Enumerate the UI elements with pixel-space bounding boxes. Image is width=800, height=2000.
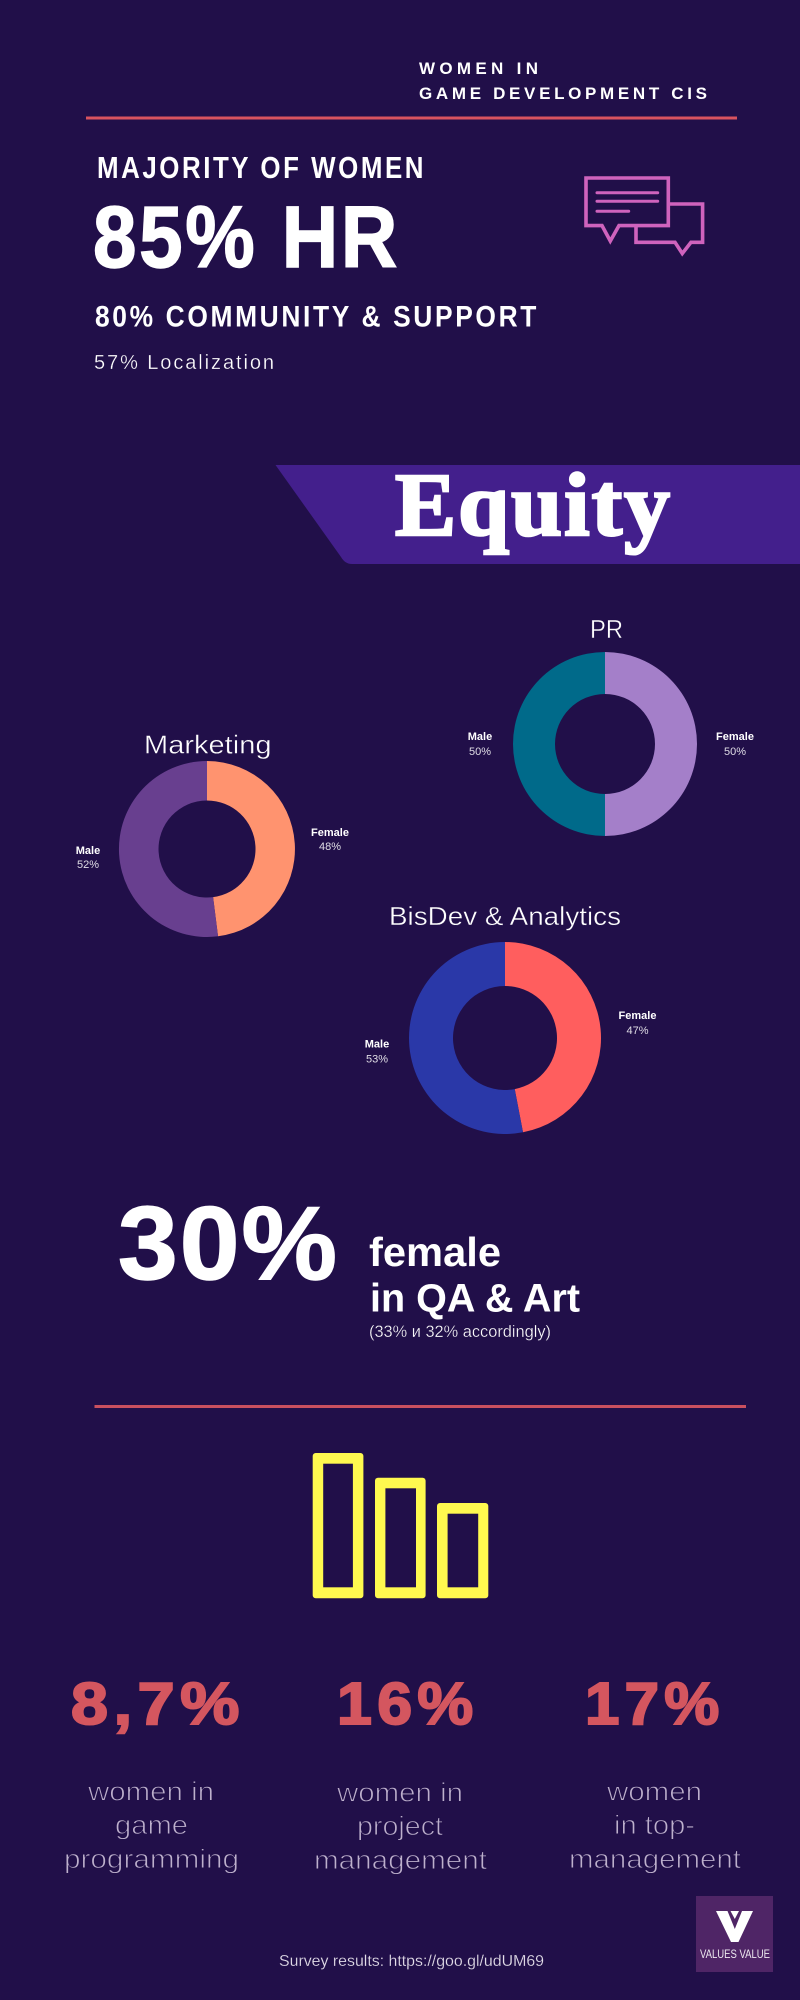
icon: yellow bar chart	[313, 1453, 488, 1598]
chart: BisDev and Analytics donut: BisDev & Analytics	[389, 901, 621, 931]
banner: equity	[276, 456, 800, 564]
chart: BisDev and Analytics donut: Female	[619, 1010, 656, 1022]
title	[419, 59, 707, 103]
chart: Marketing donut	[76, 730, 349, 937]
panel: stat women in top-management: in top-	[614, 1810, 695, 1840]
survey source: Survey results: https://goo.gl/udUM69	[279, 1953, 544, 1970]
panel: stat women in top-management: women	[606, 1777, 702, 1807]
stat: 30% female in QA and Art: in QA & Art	[370, 1276, 580, 1320]
logo: Values Value: VALUES VALUE	[700, 1947, 770, 1961]
chart: PR donut: 50%	[469, 746, 491, 758]
panel: stat women in game programming: game	[115, 1810, 188, 1840]
panel: stat women in game programming: women in	[87, 1777, 214, 1807]
chart: BisDev and Analytics donut: 47%	[626, 1025, 649, 1037]
stat: 30% female in QA and Art: 30%	[118, 1186, 339, 1302]
panel: stat women in game programming	[64, 1671, 245, 1874]
panel: majority of women	[93, 151, 539, 374]
chart: Marketing donut: 52%	[77, 859, 99, 871]
title: GAME DEVELOPMENT CIS	[419, 84, 707, 103]
stat: 80% community and support: 80% COMMUNITY & SUPPORT	[95, 300, 539, 334]
stat: 57% localization: 57% Localization	[94, 352, 274, 374]
chart: BisDev and Analytics donut	[365, 901, 656, 1134]
panel: stat women in project management: project	[357, 1811, 444, 1841]
heading: majority of women: MAJORITY OF WOMEN	[97, 151, 426, 185]
panel: stat women in project management: management	[314, 1845, 488, 1875]
panel: stat women in game programming: 8,7%	[71, 1671, 245, 1737]
chart: PR donut: Male	[468, 731, 492, 743]
panel: stat women in project management: women in	[336, 1778, 463, 1808]
icon: chat bubbles	[586, 178, 703, 254]
chart: PR donut	[468, 614, 754, 836]
chart: PR donut: PR	[590, 614, 623, 644]
stat: 85% HR: 85% HR	[93, 189, 400, 286]
chart: Marketing donut: Female	[311, 827, 349, 839]
chart: BisDev and Analytics donut: 53%	[366, 1054, 388, 1066]
panel: stat women in top-management: 17%	[585, 1671, 724, 1737]
chart: BisDev and Analytics donut: Male	[365, 1038, 389, 1050]
title: WOMEN IN	[419, 59, 538, 78]
chart: PR donut: 50%	[724, 746, 746, 758]
panel: stat women in top-management	[569, 1671, 742, 1874]
stat: 30% female in QA and Art	[118, 1186, 580, 1341]
panel: stat women in game programming: programming	[64, 1844, 239, 1874]
chart: Marketing donut: 48%	[319, 841, 341, 853]
stat: 30% female in QA and Art: (33% и 32% accordingly)	[369, 1322, 551, 1341]
chart: PR donut: Female	[716, 731, 754, 743]
banner: equity: Equity	[395, 456, 672, 555]
stat: 30% female in QA and Art: female	[369, 1229, 501, 1275]
chart: Marketing donut: Marketing	[144, 730, 272, 760]
logo: Values Value	[696, 1896, 773, 1972]
panel: stat women in project management: 16%	[337, 1671, 478, 1737]
panel: stat women in project management	[314, 1671, 488, 1875]
chart: Marketing donut: Male	[76, 845, 100, 857]
panel: stat women in top-management: management	[569, 1844, 742, 1874]
